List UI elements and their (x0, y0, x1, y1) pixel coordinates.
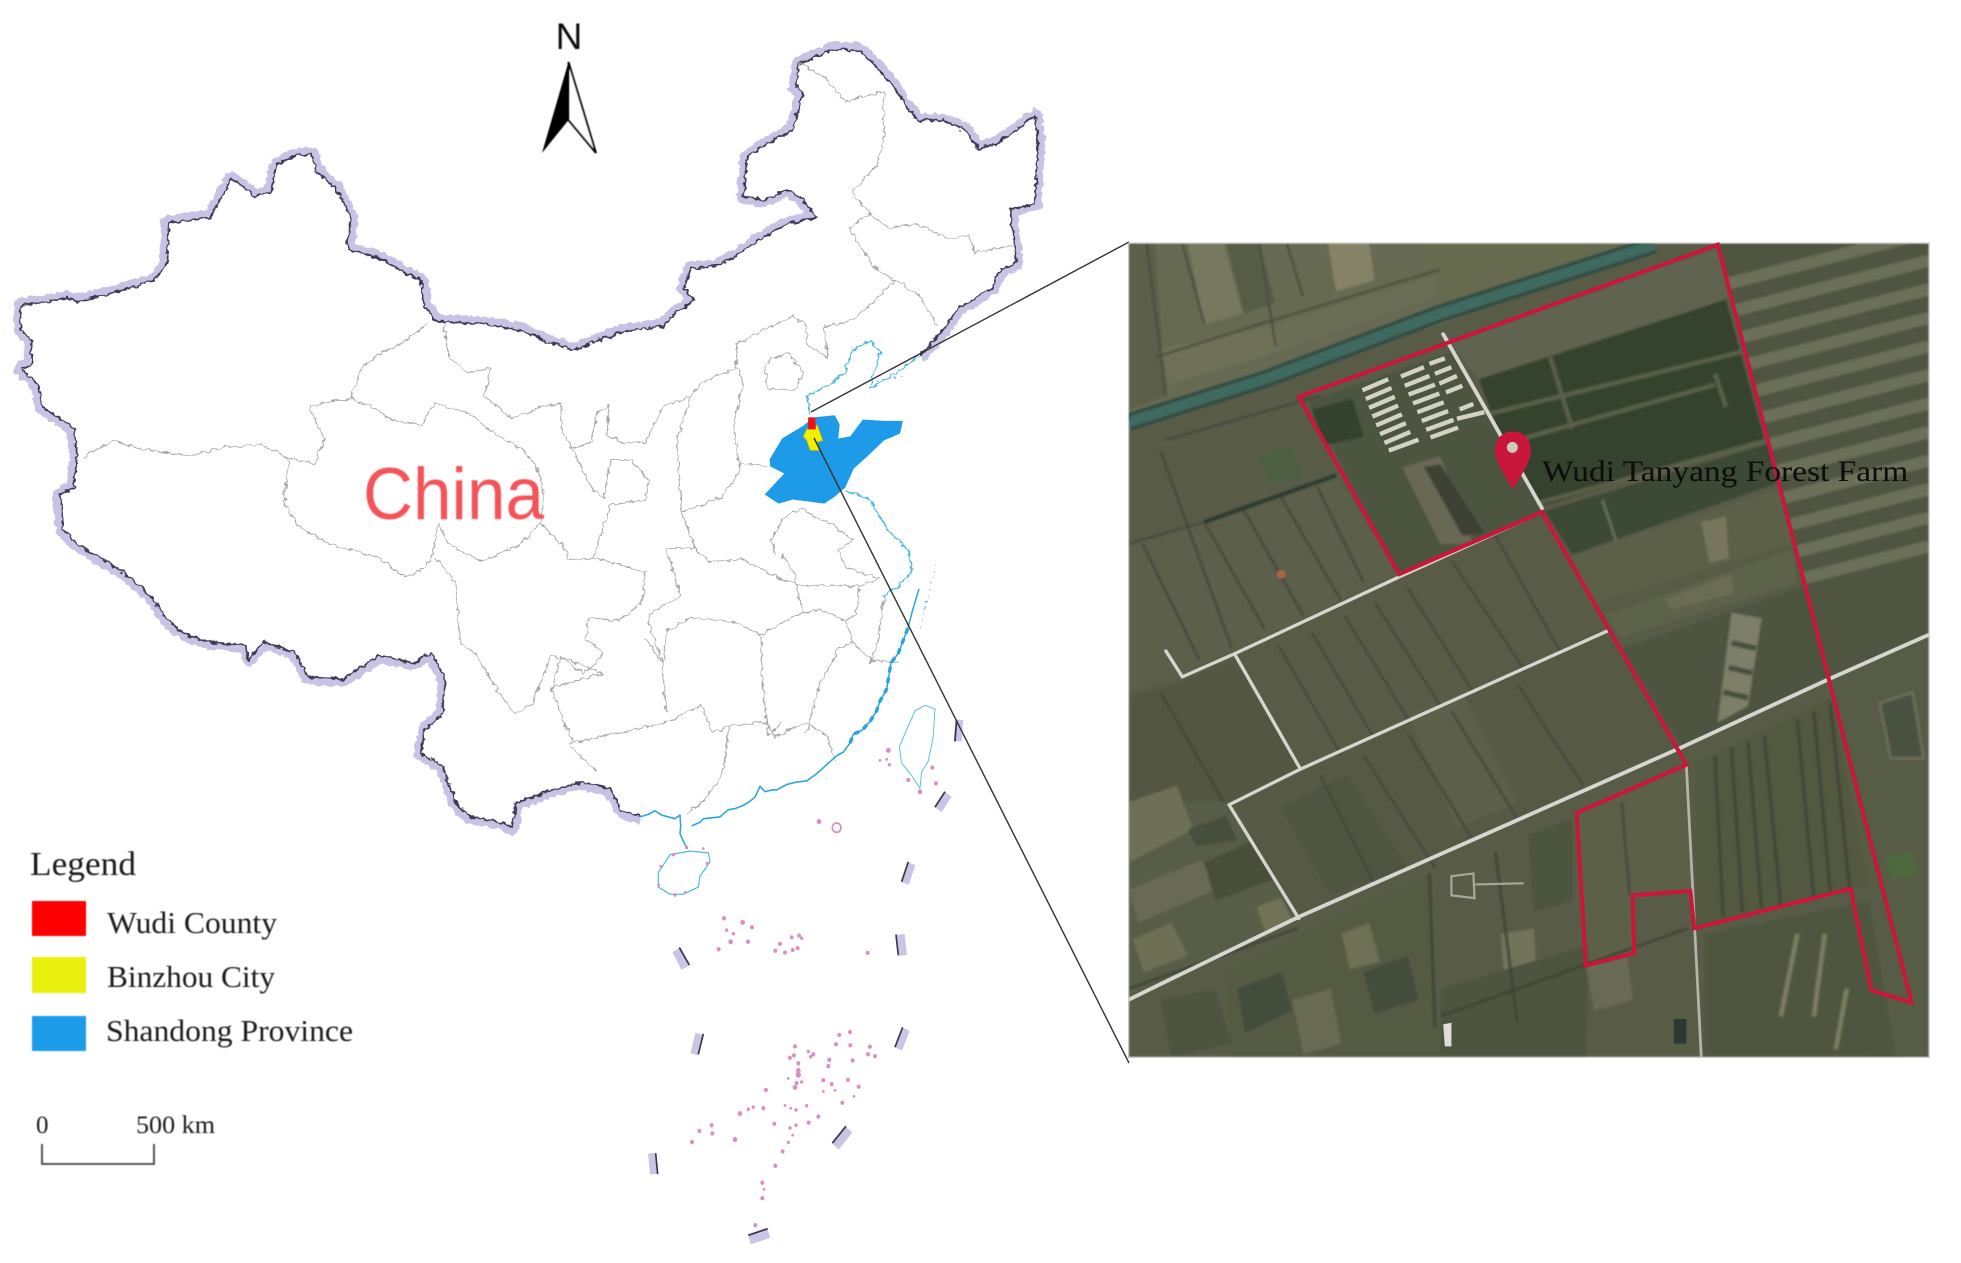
southern patchwork (1302, 1056, 1308, 1057)
national border (21, 49, 1038, 828)
legend title: Legend (30, 846, 136, 883)
legend item: Binzhou City (32, 957, 276, 994)
coastline (807, 340, 937, 631)
right striped fields (1715, 232, 1929, 682)
connector lines to inset (811, 242, 1129, 1063)
panel: satellite inset (1129, 232, 1929, 1057)
western fields (1129, 475, 1399, 692)
Wudi County (808, 417, 816, 429)
scale bar (36, 1112, 216, 1164)
nine-dash line (652, 720, 959, 1240)
panel: China map (21, 49, 1038, 1240)
icon: location pin (1495, 431, 1531, 489)
scale bar: 500 km (136, 1112, 216, 1139)
scale bar: 0 (36, 1112, 48, 1139)
south coast, islands and nine-dash line (640, 589, 959, 1240)
central fields (1235, 631, 1682, 917)
reef ring (832, 823, 841, 832)
north arrow: N (556, 16, 582, 57)
legend (30, 846, 353, 1051)
field dividers (1129, 396, 1583, 884)
north arrow (542, 16, 596, 153)
label: China: China (363, 454, 544, 535)
Shandong Province (765, 415, 903, 504)
South China Sea islands (657, 748, 938, 1227)
island: Taiwan (899, 705, 935, 788)
legend item: Wudi County (32, 901, 278, 940)
roads (1129, 334, 1929, 1057)
satellite imagery (1129, 232, 1929, 1057)
island: Hainan (658, 851, 710, 894)
south China coast (640, 589, 919, 847)
Binzhou City (803, 425, 823, 450)
province boundaries (83, 63, 1014, 814)
lower right (1928, 1054, 1929, 1056)
farm interior (1482, 354, 1553, 378)
legend item: Shandong Province: Shandong Province (106, 1013, 353, 1048)
map outline and provinces (21, 49, 1038, 828)
forest farm boundary (1299, 245, 1912, 1002)
legend item: Shandong Province (32, 1013, 353, 1051)
compound (1718, 613, 1762, 722)
canal (1129, 245, 1655, 422)
legend item: Wudi County: Wudi County (107, 905, 278, 940)
legend item: Binzhou City: Binzhou City (107, 959, 276, 994)
poultry sheds (1362, 358, 1484, 451)
coastal thickening (850, 628, 908, 743)
label: Wudi Tanyang Forest Farm: Wudi Tanyang Forest Farm (1542, 456, 1908, 488)
